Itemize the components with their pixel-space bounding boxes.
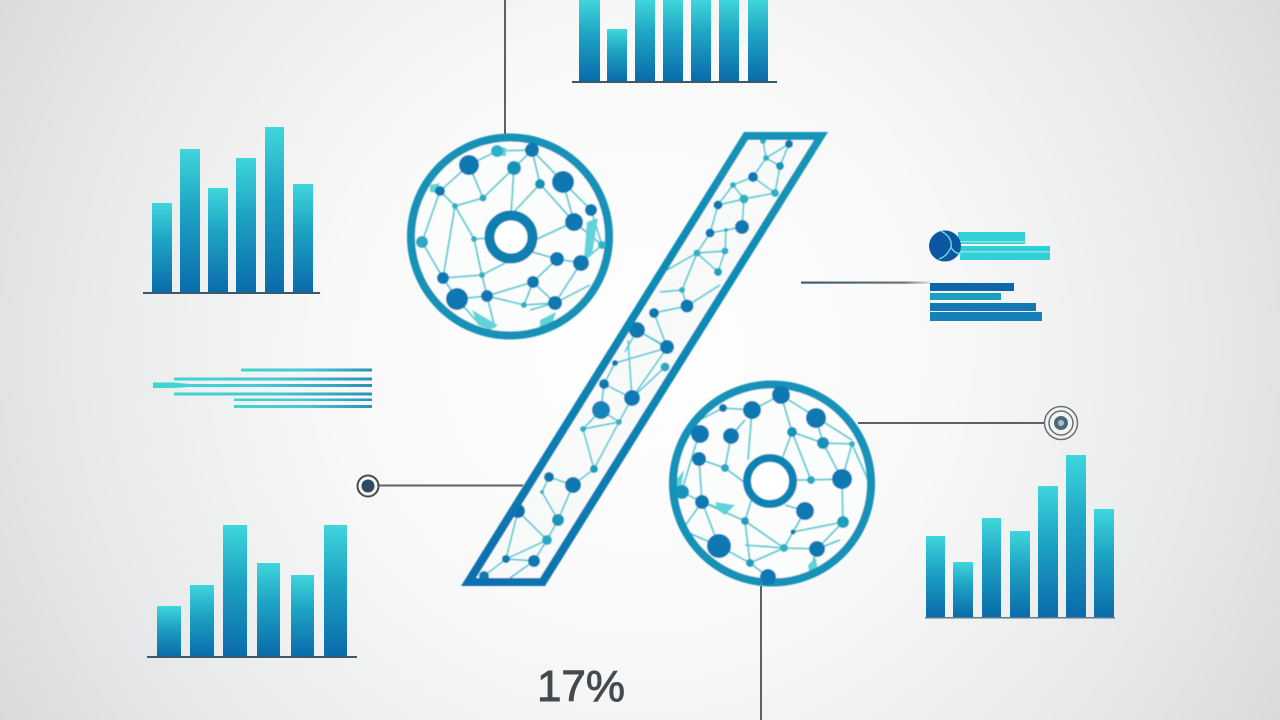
connector line: bottom (760, 586, 762, 720)
connector with target marker: right (858, 406, 1078, 440)
percentage label: 17% (537, 662, 625, 711)
outer ring (673, 384, 871, 582)
slash network nodes (479, 138, 793, 581)
network nodes (675, 386, 855, 585)
slash outline (461, 132, 828, 586)
horizontal line chart: left (153, 368, 372, 408)
percent slash (461, 132, 828, 586)
percent sign (411, 132, 871, 586)
icon: dot marker (358, 476, 378, 496)
light patches (673, 470, 818, 578)
slash network links (484, 141, 789, 578)
bar chart: upper left (143, 127, 320, 294)
horizontal bars: right lower (930, 283, 1042, 321)
icon: globe ball (929, 230, 962, 262)
connector line: top (504, 0, 506, 134)
center ring (747, 458, 793, 504)
percent circle: lower (673, 384, 871, 585)
center ring (490, 216, 532, 258)
connector line: middle right (801, 282, 930, 284)
bar chart: lower left (147, 525, 357, 658)
connector with dot marker: left (358, 476, 523, 496)
bar chart: top (572, 0, 777, 83)
bar chart: lower right (925, 455, 1115, 618)
icon: target marker (1044, 406, 1078, 440)
network links (682, 395, 868, 577)
outer ring (411, 138, 609, 336)
network links (422, 150, 602, 328)
light patches (430, 146, 598, 332)
network nodes (416, 143, 606, 310)
percent circle: upper (411, 138, 609, 336)
horizontal bars: right upper with ball (929, 230, 1050, 262)
